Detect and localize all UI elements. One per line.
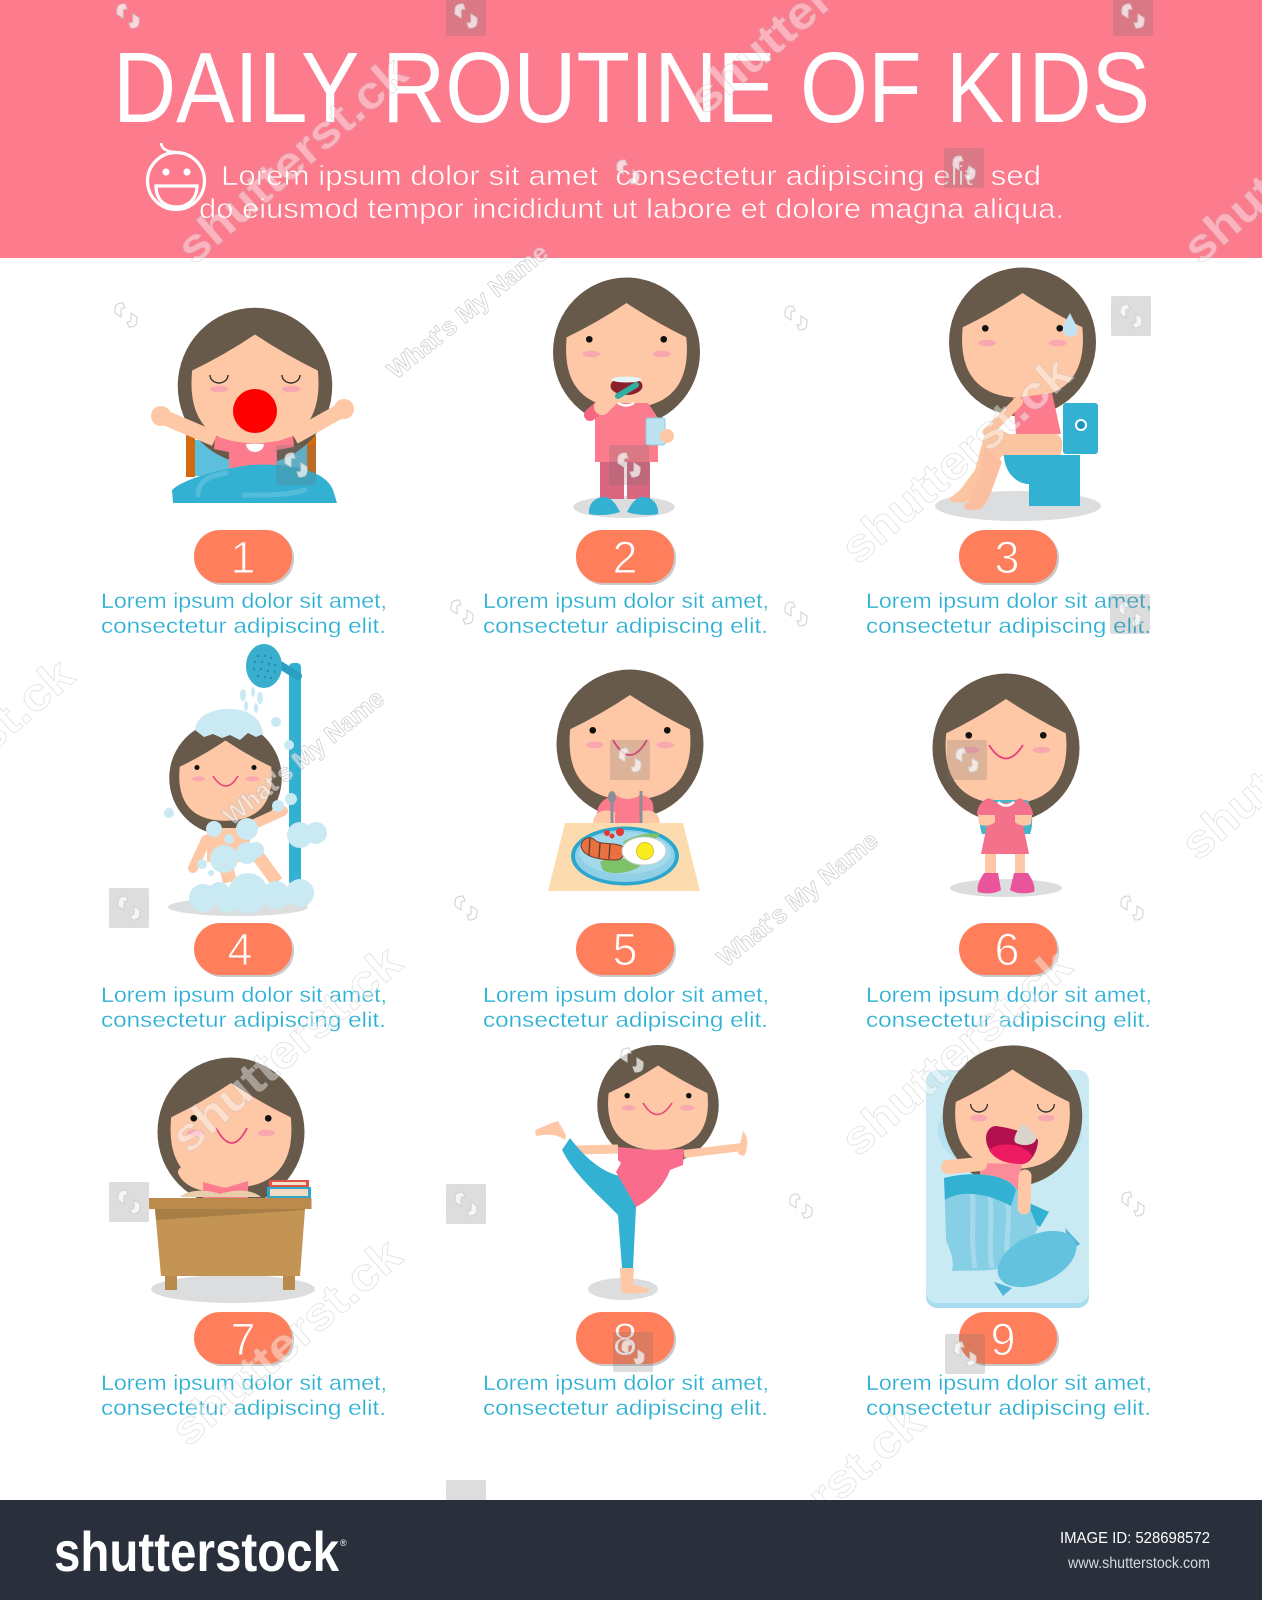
watermarks: stock photo overlays: shutterst.ck: [830, 938, 1082, 1166]
footer logo: shutterstock: [54, 1520, 340, 1583]
panel: step 1 waking up: [101, 308, 387, 638]
number badge 9: [959, 1312, 1059, 1366]
watermarks: stock photo overlays: What's My Name: [218, 684, 390, 831]
illustration: girl on the toilet: [935, 268, 1101, 521]
watermarks: stock photo overlays: shutterst.ck: [160, 935, 412, 1163]
caption 2: Lorem ipsum dolor sit amet,: [483, 590, 769, 613]
caption 8: Lorem ipsum dolor sit amet,: [483, 1372, 769, 1395]
caption 3: [866, 590, 1152, 638]
panel: step 7 study: [101, 1058, 387, 1420]
number badge 1: 1: [230, 532, 256, 583]
panel: step 2 brushing teeth: [483, 278, 769, 638]
number badge 7: 7: [230, 1314, 256, 1365]
illustration: girl studying at desk: [149, 1058, 315, 1303]
number badge 2: 2: [612, 532, 638, 583]
number badge 5: 5: [612, 924, 638, 975]
number badge 6: [959, 923, 1059, 977]
number badge 8: [576, 1312, 676, 1366]
caption 2: consectetur adipiscing elit.: [483, 615, 768, 638]
caption 7: consectetur adipiscing elit.: [101, 1397, 386, 1420]
illustration: girl showering with bubbles: [164, 644, 327, 916]
illustration: girl sleeping in bed: [926, 1045, 1089, 1308]
illustration: girl doing yoga pose: [535, 1045, 747, 1300]
caption 4: Lorem ipsum dolor sit amet,: [101, 984, 387, 1007]
caption 6: consectetur adipiscing elit.: [866, 1009, 1151, 1032]
panel: step 4 shower: [101, 644, 387, 1032]
number badge 1: [194, 530, 294, 585]
watermarks: stock photo overlays: What's My Name: [382, 238, 554, 385]
number badge 2: [576, 530, 676, 585]
caption 8: consectetur adipiscing elit.: [483, 1397, 768, 1420]
illustration: girl eating breakfast: [548, 670, 704, 891]
caption 8: [483, 1372, 769, 1420]
caption 4: [101, 984, 387, 1032]
caption 2: [483, 590, 769, 638]
illustration: girl with backpack: [932, 674, 1080, 897]
watermarks: stock photo overlays: shutterst.ck: [830, 346, 1082, 574]
panel: step 8 exercise: [483, 1045, 769, 1420]
number badge 4: [194, 923, 294, 977]
caption 1: [101, 590, 387, 638]
illustration: girl stretching in bed: [151, 308, 354, 503]
caption 9: Lorem ipsum dolor sit amet,: [866, 1372, 1152, 1395]
caption 5: [483, 984, 769, 1032]
watermarks: stock photo overlays: shutterst.ck: [160, 1228, 412, 1456]
caption 6: [866, 984, 1152, 1032]
caption 6: Lorem ipsum dolor sit amet,: [866, 984, 1152, 1007]
number badge 5: [576, 923, 676, 977]
caption 3: consectetur adipiscing elit.: [866, 615, 1151, 638]
registered mark: ®: [340, 1538, 347, 1548]
number badge 6: 6: [994, 924, 1020, 975]
number badge 9: 9: [990, 1314, 1016, 1365]
panel: step 5 breakfast: [483, 670, 769, 1032]
footer bar: [0, 1500, 1262, 1600]
panel: step 6 school: [866, 674, 1152, 1032]
caption 4: consectetur adipiscing elit.: [101, 1009, 386, 1032]
header banner: do eiusmod tempor incididunt ut labore et dolore magna aliqua.: [199, 193, 1064, 224]
caption 7: Lorem ipsum dolor sit amet,: [101, 1372, 387, 1395]
caption 7: [101, 1372, 387, 1420]
illustration: girl brushing teeth: [553, 278, 700, 518]
watermarks: stock photo overlays: shutterst.ck: [166, 46, 418, 274]
caption 9: [866, 1372, 1152, 1420]
caption 9: consectetur adipiscing elit.: [866, 1397, 1151, 1420]
panel: step 3 toilet: [866, 268, 1152, 638]
website: www.shutterstock.com: [1067, 1555, 1210, 1572]
image id: IMAGE ID: 528698572: [1060, 1530, 1210, 1547]
caption 1: Lorem ipsum dolor sit amet,: [101, 590, 387, 613]
header banner: [0, 0, 1262, 258]
number badge 3: [959, 530, 1059, 585]
caption 1: consectetur adipiscing elit.: [101, 615, 386, 638]
caption 5: Lorem ipsum dolor sit amet,: [483, 984, 769, 1007]
number badge 8: 8: [612, 1314, 638, 1365]
number badge 7: [194, 1312, 294, 1366]
caption 3: Lorem ipsum dolor sit amet,: [866, 590, 1152, 613]
panel: step 9 sleep: [866, 1045, 1152, 1420]
number badge 4: 4: [227, 924, 253, 975]
number badge 3: 3: [994, 532, 1020, 583]
subtitle: Lorem ipsum dolor sit amet consectetur adipiscing elit sed: [221, 160, 1041, 191]
watermarks: stock photo overlays: What's My Name: [712, 826, 884, 973]
icon: laughing face: [148, 143, 204, 210]
caption 5: consectetur adipiscing elit.: [483, 1009, 768, 1032]
